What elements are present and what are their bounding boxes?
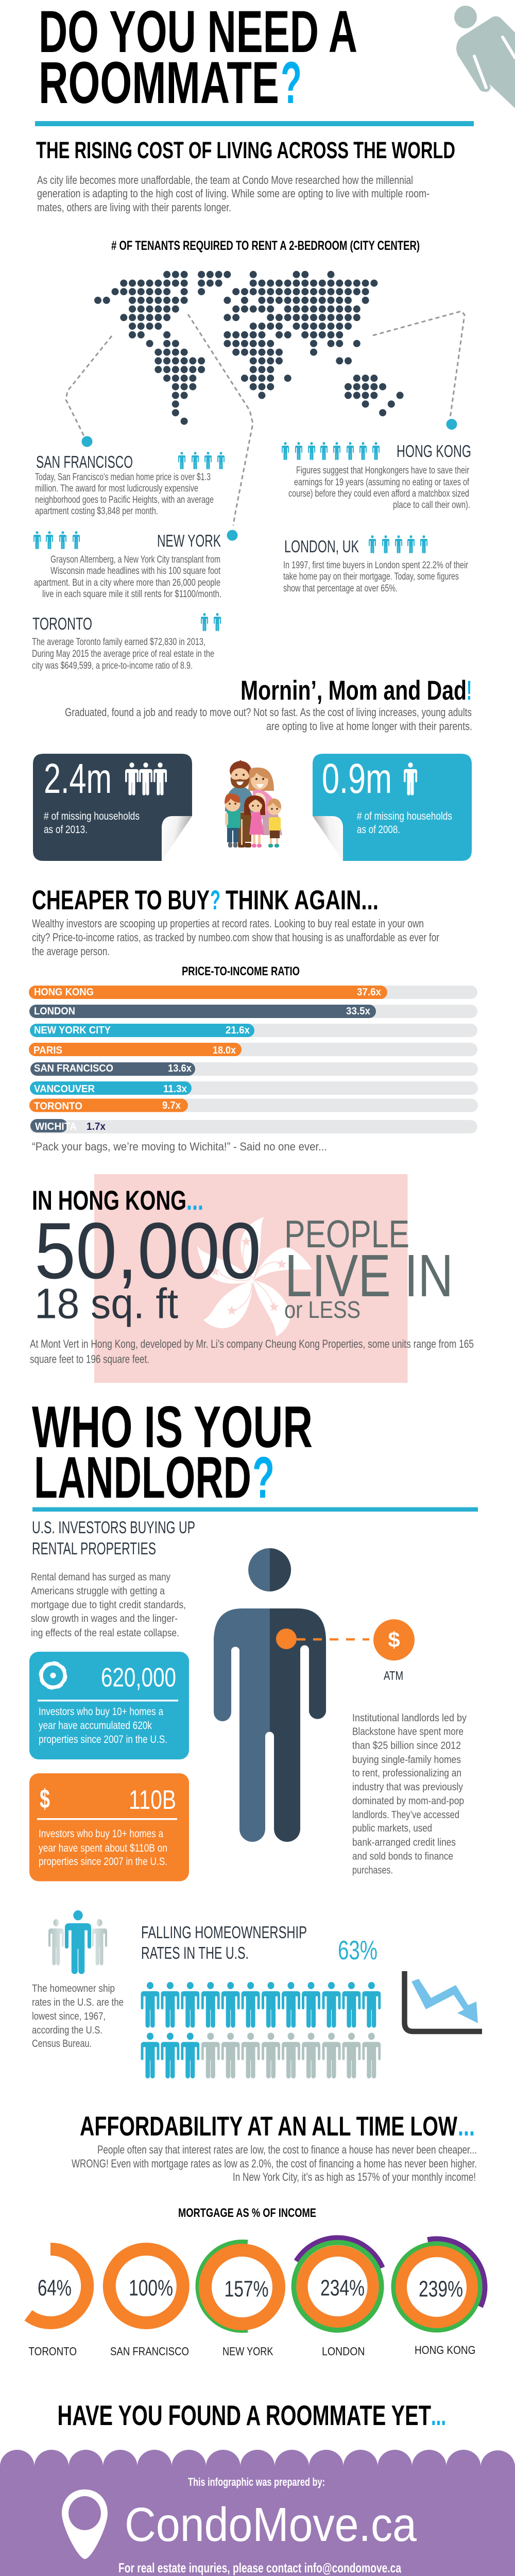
heading: falling homeownership: FALLING HOMEOWNERSHIP (141, 1923, 307, 1942)
icon: group of people (48, 1910, 107, 1974)
text: institutional landlords: industry that was previously (352, 1781, 464, 1793)
panel: New York: NEW YORK (157, 531, 221, 550)
heading: who is your landlord (32, 1395, 313, 1511)
bar chart: price-to-income ratio: WICHITA (35, 1121, 77, 1132)
text: homeownership: The homeowner ship (32, 1982, 115, 1994)
text: institutional landlords: to rent, professionalizing an (352, 1767, 461, 1779)
text: institutional landlords: buying single-family homes (352, 1754, 461, 1766)
text: homeownership: rates in the U.S. are the (32, 1996, 124, 2008)
text: institutional landlords: bank-arranged credit lines (352, 1836, 456, 1849)
icon: map pin (62, 2489, 108, 2559)
bar chart: price-to-income ratio: 11.3x (163, 1083, 187, 1095)
donut: Toronto: TORONTO (29, 2345, 77, 2358)
heading: cheaper to buy: CHEAPER TO BUY (32, 885, 210, 916)
panel: footer (0, 2450, 515, 2576)
chart title: price-to-income ratio: PRICE-TO-INCOME RATIO (182, 964, 300, 978)
bar chart: price-to-income ratio: 1.7x (87, 1121, 106, 1132)
stat: 50,000 people in 18 sq ft: or LESS (284, 1296, 360, 1323)
text: institutional landlords: landlords. They’ve accessed (352, 1809, 459, 1821)
panel: New York: live in each square mile it still rents for $1100/month. (42, 589, 221, 600)
text: wealthy investors (32, 917, 439, 958)
panel: 2.4m missing households (33, 754, 192, 861)
panel: 0.9m missing households: 0.9m (322, 755, 392, 802)
text: institutional landlords: public markets, used (352, 1822, 432, 1834)
text: institutional landlords: purchases. (352, 1864, 393, 1876)
quote: Wichita: “Pack your bags, we’re moving to Wichita!” - Said no one ever... (32, 1140, 327, 1153)
panel: Toronto: The average Toronto family earned $72,830 in 2013, (32, 637, 205, 648)
text: institutional landlords: Blackstone have spent more (352, 1726, 464, 1737)
subheading: US investors: U.S. INVESTORS BUYING UP (32, 1518, 195, 1537)
panel: 0.9m missing households (313, 754, 472, 861)
panel: 620,000 properties: Investors who buy 10+ homes a (39, 1706, 163, 1718)
bar chart: price-to-income ratio: 18.0x (213, 1045, 236, 1056)
text: wealthy investors: the average person. (32, 945, 110, 958)
bar chart: price-to-income ratio (29, 986, 478, 1133)
panel: 110B spent: properties since 2007 in the U.S. (39, 1856, 167, 1868)
chart title: mortgage: MORTGAGE AS % OF INCOME (178, 2206, 316, 2220)
text: Mont Vert (30, 1337, 474, 1365)
text: institutional landlords: and sold bonds to finance (352, 1851, 453, 1862)
heading: Mornin', Mom and Dad!: ! (467, 675, 472, 706)
title: DO YOU NEED A (39, 0, 357, 65)
text: rental demand: ing effects of the real estate collapse. (31, 1627, 179, 1639)
panel: footer: For real estate inquries, please contact info@condomove.ca (118, 2560, 401, 2575)
text: institutional landlords (352, 1712, 467, 1876)
panel: San Francisco: neighborhood goes to Pacific Heights, with an average (35, 495, 214, 505)
panel: London: LONDON, UK (284, 537, 359, 556)
panel: Hong Kong: HONG KONG (397, 442, 471, 461)
panel: 110B spent: $ (40, 1784, 50, 1814)
stat: 50,000 people in 18 sq ft: 50,000 (35, 1206, 261, 1295)
text: affordability (72, 2143, 477, 2183)
heading: cheaper to buy: ? (210, 885, 220, 916)
panel: 110B spent: 110B (129, 1785, 176, 1815)
panel: New York: Wisconsin made headlines with his 100 square foot (50, 566, 221, 577)
text: institutional landlords: than $25 billion since 2012 (352, 1739, 461, 1752)
pictogram: homeownership people (141, 1982, 381, 2078)
panel: 620,000 properties: 620,000 (101, 1663, 176, 1693)
panel: Toronto: During May 2015 the average price of real estate in the (32, 649, 214, 659)
panel: 2.4m missing households: # of missing households (44, 810, 140, 822)
text: Mont Vert: square feet to 196 square feet. (30, 1353, 149, 1365)
subheading: US investors (32, 1518, 195, 1558)
donut: San Francisco (109, 2249, 189, 2358)
title rule (35, 121, 474, 126)
callout: ATM (276, 1619, 415, 1683)
panel: San Francisco: SAN FRANCISCO (36, 452, 133, 471)
icon: badge (40, 1663, 66, 1688)
panel: 110B spent: year have spent about $110B on (39, 1842, 167, 1854)
panel: San Francisco: million. The award for most ludicrously expensive (35, 483, 198, 494)
panel: San Francisco: apartment costing $3,848 per month. (35, 506, 158, 517)
intro text (37, 174, 430, 214)
callout: ATM: $ (388, 1628, 400, 1652)
intro text: generation is adapting to the high cost of living. While some are opting to live with multiple room- (37, 187, 430, 200)
illustration: family (225, 760, 282, 848)
donut: San Francisco: 100% (129, 2275, 173, 2301)
bar chart: price-to-income ratio: VANCOUVER (34, 1083, 95, 1095)
panel: 620,000 properties: properties since 2007 in the U.S. (39, 1734, 167, 1745)
text: institutional landlords: Institutional landlords led by (352, 1712, 467, 1724)
heading: falling homeownership (141, 1923, 307, 1962)
panel: Toronto: TORONTO (32, 614, 92, 633)
panel: 620,000 properties (29, 1652, 189, 1759)
heading: who is your landlord: ? (252, 1445, 274, 1511)
panel: Toronto (32, 613, 221, 671)
heading: who is your landlord: WHO IS YOUR (32, 1395, 313, 1460)
heading: who is your landlord: LANDLORD (34, 1445, 251, 1511)
donut: London (294, 2238, 383, 2358)
text: living at home: are opting to live at home longer with their parents. (266, 720, 472, 733)
panel: 2.4m missing households: as of 2013. (44, 824, 88, 836)
panel: San Francisco (35, 452, 225, 517)
flag: Hong Kong background (94, 1174, 408, 1383)
intro text: mates, others are living with their parents longer. (37, 201, 231, 214)
bar chart: price-to-income ratio: 13.6x (168, 1063, 192, 1074)
donut: London: LONDON (322, 2345, 365, 2358)
panel: Hong Kong (282, 442, 471, 511)
bar chart: price-to-income ratio: 37.6x (357, 987, 381, 998)
dot world map (98, 275, 400, 421)
donut: Hong Kong: HONG KONG (415, 2344, 476, 2357)
text: homeownership: lowest since, 1967, (32, 2010, 106, 2022)
bar chart: price-to-income ratio: 21.6x (226, 1025, 250, 1036)
donut: Toronto (28, 2249, 88, 2358)
title: ROOMMATE (39, 50, 279, 116)
heading: cheaper to buy: THINK AGAIN... (226, 885, 379, 916)
panel: New York: apartment. But in a city where more than 26,000 people (34, 578, 220, 588)
panel: Toronto: city was $649,599, a price-to-income ratio of 8.9. (32, 660, 193, 671)
bar chart: price-to-income ratio: SAN FRANCISCO (34, 1063, 113, 1074)
donut: London: 234% (320, 2275, 365, 2301)
title: ? (281, 50, 302, 116)
panel: 0.9m missing households: as of 2008. (357, 824, 400, 836)
bar chart: price-to-income ratio: LONDON (34, 1006, 75, 1017)
panel: footer: This infographic was prepared by: (188, 2476, 325, 2488)
donut: San Francisco: SAN FRANCISCO (110, 2345, 189, 2358)
text: homeownership: Census Bureau. (32, 2038, 92, 2049)
text: homeownership: according the U.S. (32, 2024, 102, 2036)
icon: falling chart arrow (405, 1971, 482, 2031)
donut: New York: NEW YORK (222, 2345, 273, 2358)
donut: Hong Kong: 239% (419, 2276, 463, 2302)
text: rental demand: Americans struggle with getting a (31, 1585, 165, 1597)
stat: 50,000 people in 18 sq ft (35, 1206, 453, 1327)
text: institutional landlords: dominated by mom-and-pop (352, 1795, 464, 1807)
panel: 110B spent (29, 1773, 189, 1882)
heading: in Hong Kong: ... (186, 1185, 203, 1216)
panel: New York (33, 531, 221, 600)
text: living at home (65, 706, 472, 733)
bar chart: price-to-income ratio: TORONTO (34, 1100, 82, 1112)
stat: 50,000 people in 18 sq ft: LIVE IN (285, 1242, 453, 1309)
panel: 0.9m missing households: # of missing households (357, 810, 452, 822)
text: rental demand (31, 1571, 186, 1639)
panel: London (283, 535, 469, 594)
icon: walking person top right (454, 6, 515, 108)
dashed connector: Hong Kong (373, 311, 465, 430)
panel: 2.4m missing households: 2.4m (44, 755, 112, 802)
stat: 50,000 people in 18 sq ft: 18 sq. ft (35, 1280, 178, 1327)
panel: San Francisco: Today, San Francisco's median home price is over $1.3 (35, 472, 211, 483)
figure: landlord person (214, 1548, 326, 1842)
donut: Toronto: 64% (38, 2275, 72, 2301)
bar chart: price-to-income ratio: HONG KONG (34, 987, 94, 998)
text: rental demand: slow growth in wages and the linger- (31, 1613, 178, 1624)
heading: in Hong Kong: IN HONG KONG (32, 1185, 186, 1216)
bar chart: price-to-income ratio: NEW YORK CITY (34, 1025, 111, 1036)
stat: 50,000 people in 18 sq ft: PEOPLE (284, 1212, 409, 1256)
dashed connector: New York (188, 314, 253, 541)
donut: New York: 157% (225, 2276, 269, 2302)
dashed connector: San Francisco (66, 336, 112, 447)
heading: affordability: ... (458, 2111, 475, 2142)
panel: 110B spent: Investors who buy 10+ homes a (39, 1828, 163, 1840)
panel: Hong Kong: place to call their own). (393, 500, 470, 511)
bar chart: price-to-income ratio: 9.7x (162, 1100, 181, 1111)
panel: London: take home pay on their mortgage. Today, some figures (283, 571, 459, 582)
intro text: As city life becomes more unaffordable, the team at Condo Move researched how the millennial (37, 174, 413, 187)
bar chart: price-to-income ratio: 33.5x (346, 1006, 370, 1017)
title (39, 0, 357, 116)
heading: have you found a roommate yet: ... (431, 2399, 446, 2431)
bar chart: price-to-income ratio: PARIS (33, 1045, 62, 1056)
panel: 620,000 properties: year have accumulated 620k (39, 1720, 152, 1732)
text: rental demand: mortgage due to tight credit standards, (31, 1599, 186, 1611)
landlord rule (32, 1507, 478, 1512)
stat: 63%: 63% (338, 1936, 377, 1965)
heading: falling homeownership: RATES IN THE U.S. (141, 1943, 249, 1962)
callout: ATM: ATM (384, 1669, 403, 1683)
panel: footer: CondoMove.ca (125, 2498, 417, 2551)
panel: New York: Grayson Alternberg, a New York City transplant from (50, 554, 220, 565)
text: rental demand: Rental demand has surged as many (31, 1571, 171, 1583)
donut: New York (198, 2242, 279, 2358)
donut: Hong Kong (393, 2239, 485, 2357)
panel: London: show that percentage at over 65%. (283, 583, 398, 594)
text: homeownership (32, 1982, 124, 2049)
subheading: US investors: RENTAL PROPERTIES (32, 1539, 156, 1558)
